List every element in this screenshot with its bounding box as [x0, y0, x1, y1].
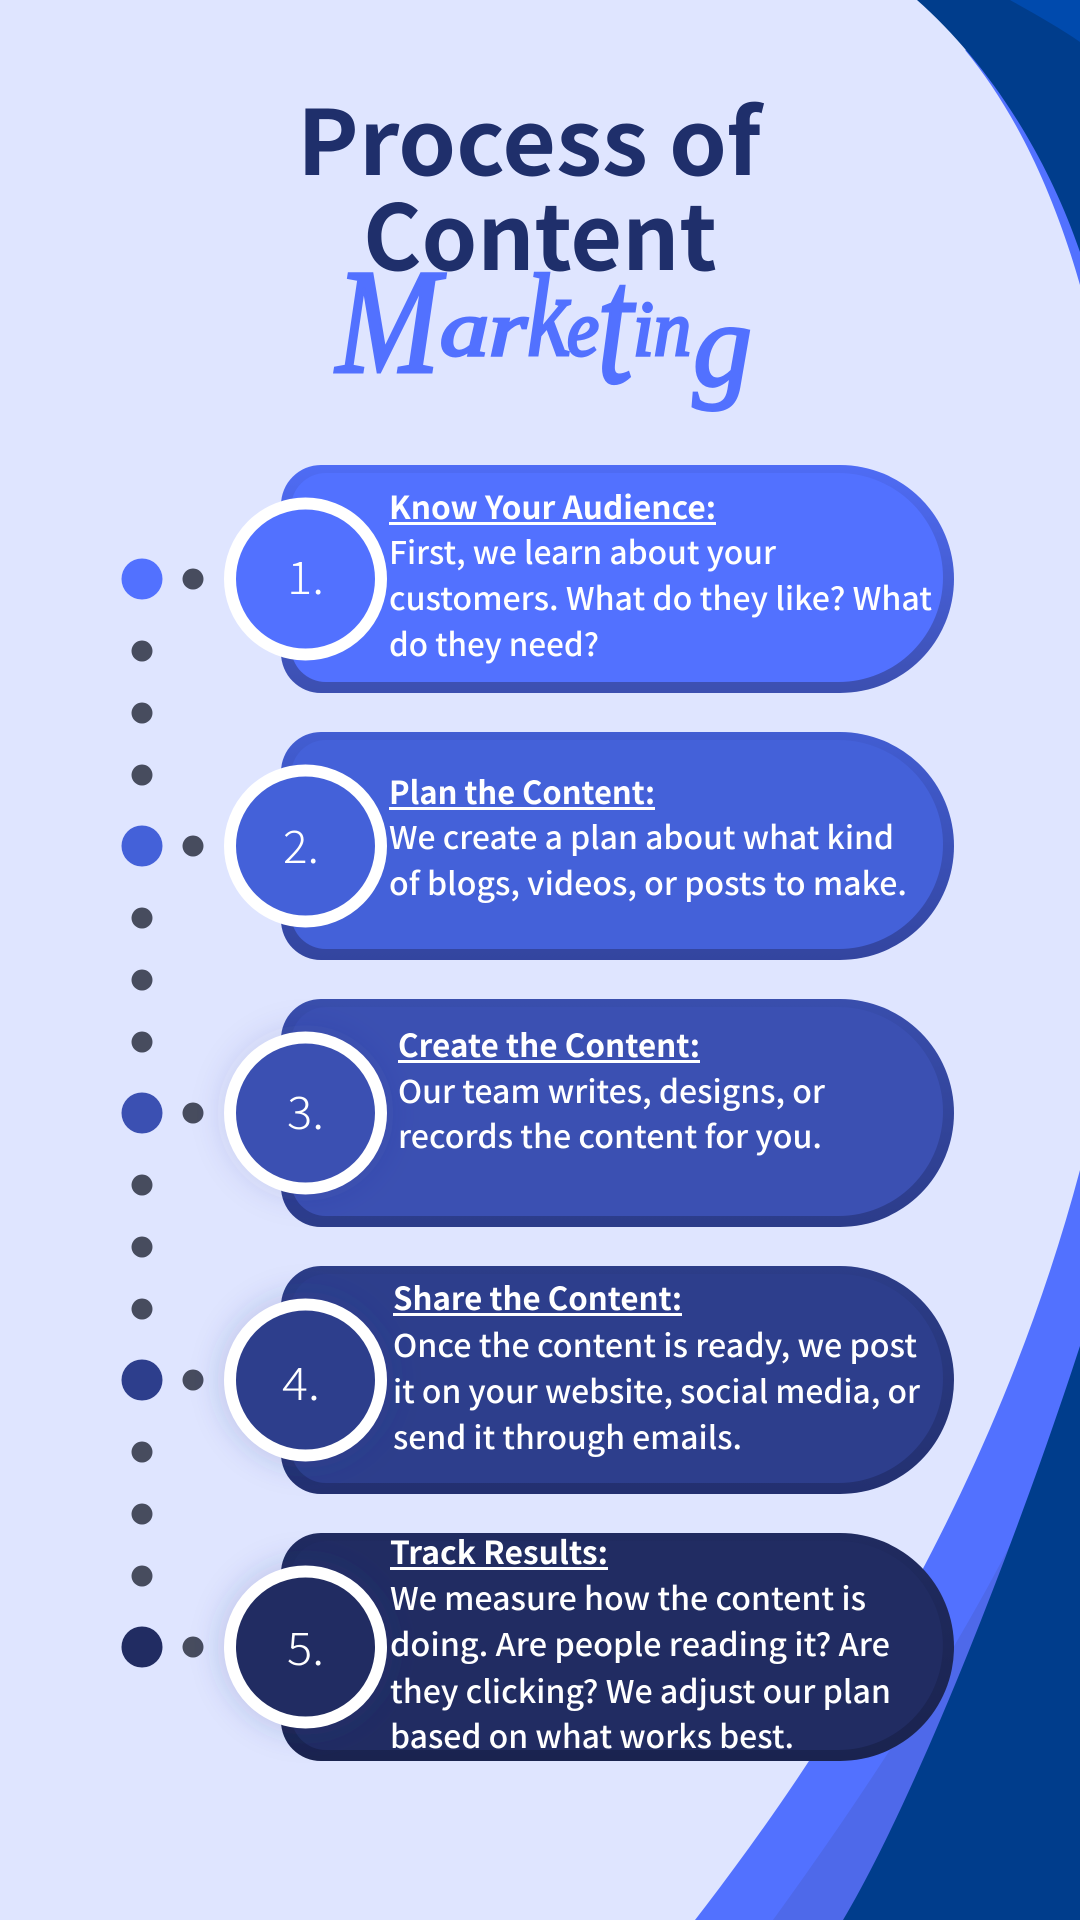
title line 1: Process of [297, 71, 765, 201]
body text step 4 [393, 1321, 920, 1459]
title script word: ar [440, 285, 528, 372]
title script word: t [597, 231, 636, 419]
heading: create the content: Create the Content: [398, 1021, 700, 1067]
body text step 5: based on what works best. [390, 1712, 794, 1758]
panel: step 1 [230, 465, 954, 693]
number badge 4 [218, 1292, 394, 1468]
decorative curves: bottom right [695, 1170, 1080, 1920]
body text step 3: Our team writes, designs, or [398, 1067, 825, 1113]
panel: step 5 [218, 1528, 954, 1761]
title script word: M [334, 239, 446, 405]
body text step 5: We measure how the content is [390, 1574, 866, 1620]
title script word: e [567, 285, 599, 372]
number badge 3 [218, 1025, 394, 1201]
title script word: k [527, 250, 571, 381]
title script word: in [633, 285, 691, 372]
decorative curves: top right [917, 0, 1080, 285]
heading: plan the content: Plan the Content: [389, 768, 655, 814]
heading: track results: Track Results: [390, 1528, 608, 1574]
body text step 1: do they need? [389, 620, 599, 666]
body text step 1: First, we learn about your [389, 528, 776, 574]
title [297, 71, 765, 419]
heading: know your audience: Know Your Audience: [389, 483, 716, 529]
number badge 3: 3. [287, 1077, 324, 1142]
timeline dots [122, 558, 204, 1668]
body text step 3 [398, 1067, 825, 1158]
panel: step 2 [230, 732, 954, 960]
panel: step 4 [218, 1266, 954, 1494]
heading: share the content: Share the Content: [393, 1274, 682, 1320]
body text step 5 [390, 1574, 891, 1758]
body text step 2: We create a plan about what kind [389, 813, 894, 859]
body text step 3: records the content for you. [398, 1112, 822, 1158]
body text step 4: it on your website, social media, or [393, 1367, 920, 1413]
panel: step 3 [218, 999, 954, 1227]
body text step 2 [389, 813, 907, 905]
number badge 5: 5. [287, 1613, 324, 1678]
number badge 4: 4. [282, 1348, 320, 1413]
number badge 5 [218, 1559, 394, 1735]
number badge 1 [230, 504, 381, 654]
body text step 1: customers. What do they like? What [389, 574, 932, 620]
number badge 2: 2. [283, 811, 319, 876]
body text step 4: Once the content is ready, we post [393, 1321, 917, 1367]
number badge 2 [230, 770, 381, 922]
body text step 5: doing. Are people reading it? Are [390, 1620, 890, 1666]
title line 2: Content [363, 166, 717, 296]
body text step 4: send it through emails. [393, 1413, 742, 1459]
title script word: g [693, 278, 752, 411]
number badge 1: 1. [287, 542, 324, 607]
body text step 2: of blogs, videos, or posts to make. [389, 859, 907, 905]
body text step 5: they clicking? We adjust our plan [390, 1667, 891, 1713]
body text step 1 [389, 528, 932, 666]
